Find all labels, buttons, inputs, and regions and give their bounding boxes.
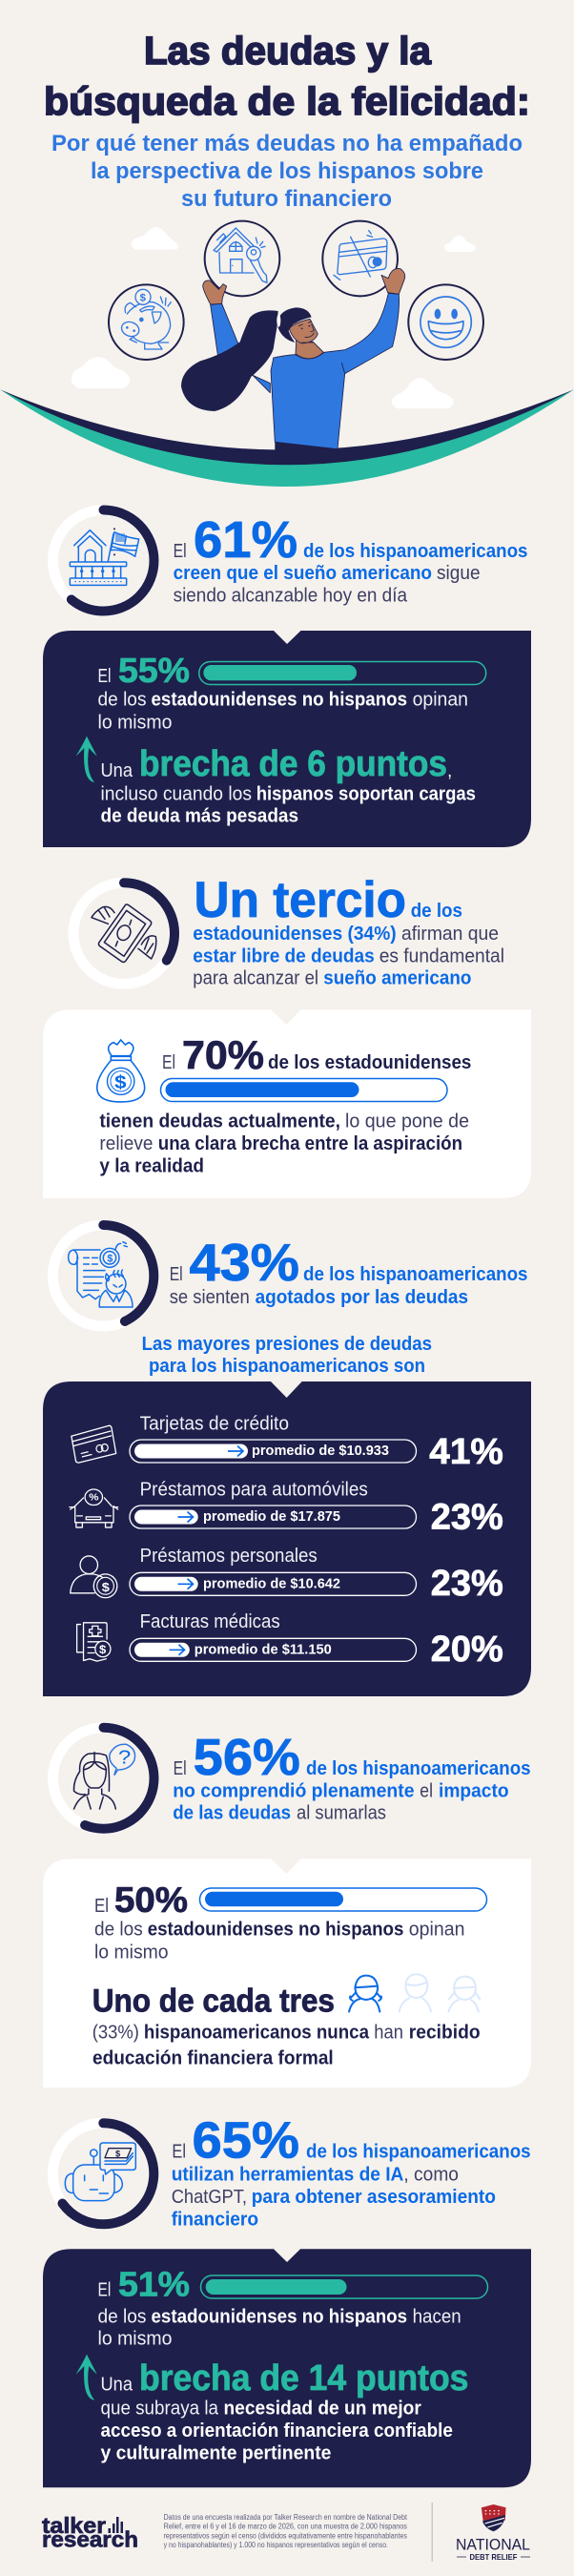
- text: 6-point gap: [101, 744, 476, 827]
- row: medical bills: Facturas médicas: [140, 1611, 280, 1632]
- row: credit cards: Tarjetas de crédito: [140, 1413, 289, 1434]
- logo: Talker Research: talker: [42, 2513, 106, 2538]
- text: 51% statement: hacen: [413, 2305, 461, 2327]
- subtitle: su futuro financiero: [181, 186, 392, 212]
- icon: three people: [349, 1974, 481, 2012]
- text: 70% statement: [99, 1032, 471, 1176]
- text: one third statement: de los: [411, 900, 462, 922]
- stat: 65%: [52, 2112, 531, 2230]
- logo: National Debt Relief: [456, 2504, 530, 2562]
- logo: Talker Research: [42, 2513, 138, 2551]
- text: 14-point gap: necesidad de un mejor: [223, 2398, 421, 2420]
- row: auto loans: [70, 1479, 503, 1538]
- icon: car: %: [89, 1492, 99, 1504]
- panel: 70% have debt: [43, 1009, 531, 1198]
- ring chart 65%: [52, 2123, 154, 2224]
- progress bar 70%: [160, 1078, 447, 1101]
- stat: 56%: [53, 1728, 531, 1829]
- text: 51% statement: de los: [97, 2305, 147, 2327]
- text: 14-point gap: y culturalmente pertinente: [101, 2441, 331, 2463]
- text: 50% statement: opinan: [409, 1919, 465, 1940]
- text: one third statement: para alcanzar el: [193, 967, 318, 989]
- text: one in three: educación financiera formal: [92, 2046, 334, 2068]
- text: 14-point gap: que subraya la: [101, 2398, 219, 2420]
- icon: person with coin: $: [102, 1579, 110, 1594]
- text: 14-point gap: Una: [101, 2375, 133, 2396]
- source note: Relief, entre el 6 y el 16 de marzo de 2026, con una muestra de 2.000 hispanos: [164, 2523, 407, 2531]
- icon: money bag: [97, 1040, 145, 1102]
- text: one third statement: [193, 872, 504, 989]
- text: 65% statement: , como: [403, 2164, 459, 2186]
- icon: smiley: [408, 284, 483, 360]
- text: 65% statement: de los hispanoamericanos: [306, 2141, 531, 2163]
- text: one in three: recibido: [409, 2022, 481, 2044]
- row: auto loans: promedio de $17.875: [203, 1508, 340, 1525]
- text: 50% statement: [94, 1880, 465, 1963]
- icon: person with coin: [71, 1556, 117, 1598]
- icon: medical bill: $: [99, 1644, 106, 1656]
- title: búsqueda de la felicidad:: [44, 79, 530, 123]
- logo: National Debt Relief: DEBT RELIEF: [469, 2552, 517, 2562]
- icon: credit card: [322, 221, 398, 296]
- text: one in three: hispanoamericanos nunca: [144, 2022, 370, 2044]
- title: [44, 29, 530, 123]
- source note: representativos según el censo (divididos equitativamente entre hispanohablantes: [164, 2532, 407, 2541]
- text: one third statement: afirman que: [401, 923, 499, 945]
- text: 6-point gap: de deuda más pesadas: [101, 806, 298, 827]
- progress bar 51%: [200, 2275, 488, 2298]
- text: 43% statement: El: [170, 1264, 183, 1285]
- source note: [164, 2513, 408, 2549]
- row: auto loans: 23%: [431, 1498, 503, 1538]
- panel: 55% non-Hispanic comparison: [43, 631, 531, 847]
- text: 50% statement: de los: [94, 1919, 143, 1940]
- text: 56% statement: El: [174, 1758, 187, 1779]
- text: one third statement: estar libre de deudas: [193, 945, 375, 966]
- person: [181, 268, 405, 460]
- text: 61% statement: creen que el sueño americano: [174, 562, 432, 584]
- text: one third statement: sueño americano: [323, 967, 471, 989]
- text: 51% statement: lo mismo: [97, 2328, 172, 2350]
- text: 56% statement: de las deudas: [173, 1802, 291, 1824]
- text: 50% statement: 50%: [114, 1880, 188, 1920]
- text: 51% statement: El: [97, 2280, 111, 2301]
- icon: AI robot: [65, 2143, 135, 2201]
- text: 56% statement: 56%: [194, 1729, 300, 1786]
- ring chart 56%: [53, 1728, 154, 1829]
- ring chart 43%: [52, 1225, 154, 1326]
- text: 61% statement: siendo alcanzable hoy en día: [174, 585, 408, 607]
- text: 56% statement: impacto: [439, 1779, 509, 1801]
- row: credit cards: [72, 1413, 503, 1472]
- text: 65% statement: El: [172, 2142, 186, 2163]
- text: 55% statement: El: [97, 666, 111, 687]
- swoosh: [0, 389, 574, 487]
- text: 14-point gap: brecha de 14 puntos: [139, 2358, 468, 2399]
- subtitle: la perspectiva de los hispanos sobre: [91, 158, 483, 184]
- subtitle: Por qué tener más deudas no ha empañado: [51, 131, 523, 156]
- ring chart 34%: [73, 883, 174, 984]
- source note: Datos de una encuesta realizada por Talker Research en nombre de National Debt: [164, 2513, 408, 2522]
- text: 70% statement: El: [162, 1052, 175, 1073]
- ring chart 61%: [53, 509, 154, 611]
- row: credit cards: 41%: [429, 1432, 503, 1472]
- text: 55% statement: lo mismo: [97, 712, 172, 733]
- footer: [42, 2503, 530, 2562]
- text: 51% statement: estadounidenses no hispanos: [151, 2305, 407, 2327]
- row: credit cards: promedio de $10.933: [252, 1443, 389, 1459]
- text: 55% statement: 55%: [118, 651, 190, 690]
- text: 61% statement: 61%: [194, 511, 297, 569]
- text: 55% statement: estadounidenses no hispanos: [151, 689, 407, 710]
- text: 14-point gap: [101, 2358, 468, 2463]
- panel: 51% non-Hispanic comparison: [43, 2249, 531, 2487]
- icon: up arrow: [75, 737, 97, 782]
- text: 56% statement: [173, 1729, 531, 1824]
- icon: piggy bank: [109, 284, 184, 360]
- text: 56% statement: de los hispanoamericanos: [306, 1757, 531, 1779]
- stat: 61%: [53, 509, 528, 611]
- icon: car: [70, 1489, 118, 1527]
- title: Las deudas y la: [144, 29, 432, 73]
- row: medical bills: [77, 1611, 503, 1670]
- stat: 43%: [52, 1225, 528, 1326]
- text: 61% statement: de los hispanoamericanos: [303, 540, 528, 562]
- text: 70% statement: 70%: [182, 1032, 264, 1077]
- row: auto loans: Préstamos para automóviles: [140, 1479, 368, 1500]
- text: 65% statement: ChatGPT,: [172, 2186, 247, 2208]
- text: 55% statement: opinan: [413, 689, 468, 710]
- progress bar 55%: [199, 662, 486, 685]
- text: 65% statement: utilizan herramientas de IA: [172, 2164, 404, 2186]
- row: personal loans: promedio de $10.642: [203, 1576, 340, 1592]
- text: one third statement: es fundamental: [379, 945, 504, 966]
- heading: biggest debt pressures: [142, 1333, 432, 1377]
- text: 65% statement: 65%: [193, 2112, 299, 2170]
- text: 56% statement: el: [420, 1779, 433, 1801]
- logo: Talker Research: research: [42, 2526, 138, 2551]
- text: 65% statement: para obtener asesoramiento: [252, 2186, 496, 2208]
- icon: house and key: [205, 221, 279, 296]
- icon: up arrow: [75, 2355, 97, 2400]
- text: 70% statement: y la realidad: [99, 1154, 204, 1176]
- row: medical bills: promedio de $11.150: [195, 1641, 332, 1658]
- text: one in three: han: [374, 2022, 403, 2044]
- text: 70% statement: tienen deudas actualmente,: [99, 1111, 340, 1132]
- text: 43% statement: 43%: [189, 1233, 299, 1292]
- text: 56% statement: no comprendió plenamente: [173, 1779, 414, 1801]
- icon: flying money: [92, 904, 156, 962]
- icon: card: [72, 1425, 116, 1463]
- text: one in three: Uno de cada tres: [92, 1983, 335, 2019]
- subtitle: [51, 131, 523, 212]
- text: one in three: (33%): [92, 2022, 139, 2044]
- icon: confused woman: ?: [118, 1746, 131, 1768]
- text: 43% statement: [170, 1233, 527, 1308]
- row: personal loans: [71, 1546, 503, 1604]
- text: 50% statement: El: [94, 1896, 109, 1917]
- text: 6-point gap: ,: [447, 761, 452, 781]
- text: one third statement: Un tercio: [195, 872, 406, 928]
- heading: biggest debt pressures: Las mayores presiones de deudas: [142, 1333, 432, 1355]
- text: 50% statement: estadounidenses no hispanos: [148, 1919, 403, 1940]
- panel: debt pressures list: [43, 1381, 531, 1696]
- heading: biggest debt pressures: para los hispanoamericanos son: [149, 1355, 425, 1377]
- text: 6-point gap: incluso cuando los: [101, 783, 252, 804]
- logo: National Debt Relief: NATIONAL: [456, 2536, 530, 2554]
- text: 65% statement: [172, 2112, 531, 2230]
- icon: medical bill: [77, 1623, 111, 1661]
- text: 70% statement: una clara brecha entre la aspiración: [158, 1132, 462, 1154]
- text: one third statement: estadounidenses (34%): [193, 923, 397, 945]
- text: 61% statement: [174, 511, 528, 607]
- text: 51% statement: 51%: [118, 2265, 190, 2304]
- text: 55% statement: de los: [97, 689, 147, 710]
- text: 43% statement: agotados por las deudas: [256, 1286, 468, 1308]
- hero illustration: [0, 221, 574, 487]
- source note: y no hispanohablantes) y 1.000 no hispanos representativos según el censo.: [164, 2541, 388, 2549]
- icon: AI robot: $: [115, 2149, 121, 2158]
- text: 56% statement: al sumarlas: [297, 1802, 386, 1824]
- progress bar 50%: [200, 1888, 486, 1911]
- row: medical bills: 20%: [431, 1630, 503, 1670]
- text: 65% statement: financiero: [172, 2208, 258, 2230]
- text: 61% statement: El: [174, 541, 187, 562]
- text: 70% statement: lo que pone de: [345, 1111, 469, 1132]
- text: 43% statement: se sienten: [170, 1286, 250, 1308]
- text: 55% statement: [97, 651, 468, 733]
- icon: bill and stressed person: $: [107, 1253, 113, 1264]
- text: 6-point gap: Una: [101, 760, 133, 781]
- text: 50% statement: lo mismo: [94, 1942, 169, 1963]
- row: personal loans: Préstamos personales: [140, 1546, 318, 1567]
- row: personal loans: 23%: [431, 1564, 503, 1604]
- stat: one third: [73, 872, 504, 989]
- text: 14-point gap: acceso a orientación financiera confiable: [101, 2420, 453, 2441]
- text: 51% statement: [97, 2265, 461, 2350]
- text: 6-point gap: brecha de 6 puntos: [139, 744, 447, 784]
- icon: house with flag: [70, 528, 139, 585]
- icon: bill and stressed person: [69, 1242, 133, 1307]
- text: 61% statement: sigue: [437, 562, 481, 584]
- text: 6-point gap: hispanos soportan cargas: [256, 783, 476, 804]
- text: one in three: [92, 1983, 481, 2068]
- icon: money bag: $: [114, 1072, 127, 1092]
- text: 70% statement: de los estadounidenses: [268, 1051, 471, 1073]
- text: 43% statement: de los hispanoamericanos: [303, 1263, 528, 1285]
- clouds: [72, 227, 476, 408]
- text: 70% statement: relieve: [99, 1132, 153, 1154]
- icon: piggy bank: $: [140, 292, 147, 303]
- panel: 50% and one in three: [43, 1859, 531, 2088]
- icon: confused woman: [73, 1744, 135, 1809]
